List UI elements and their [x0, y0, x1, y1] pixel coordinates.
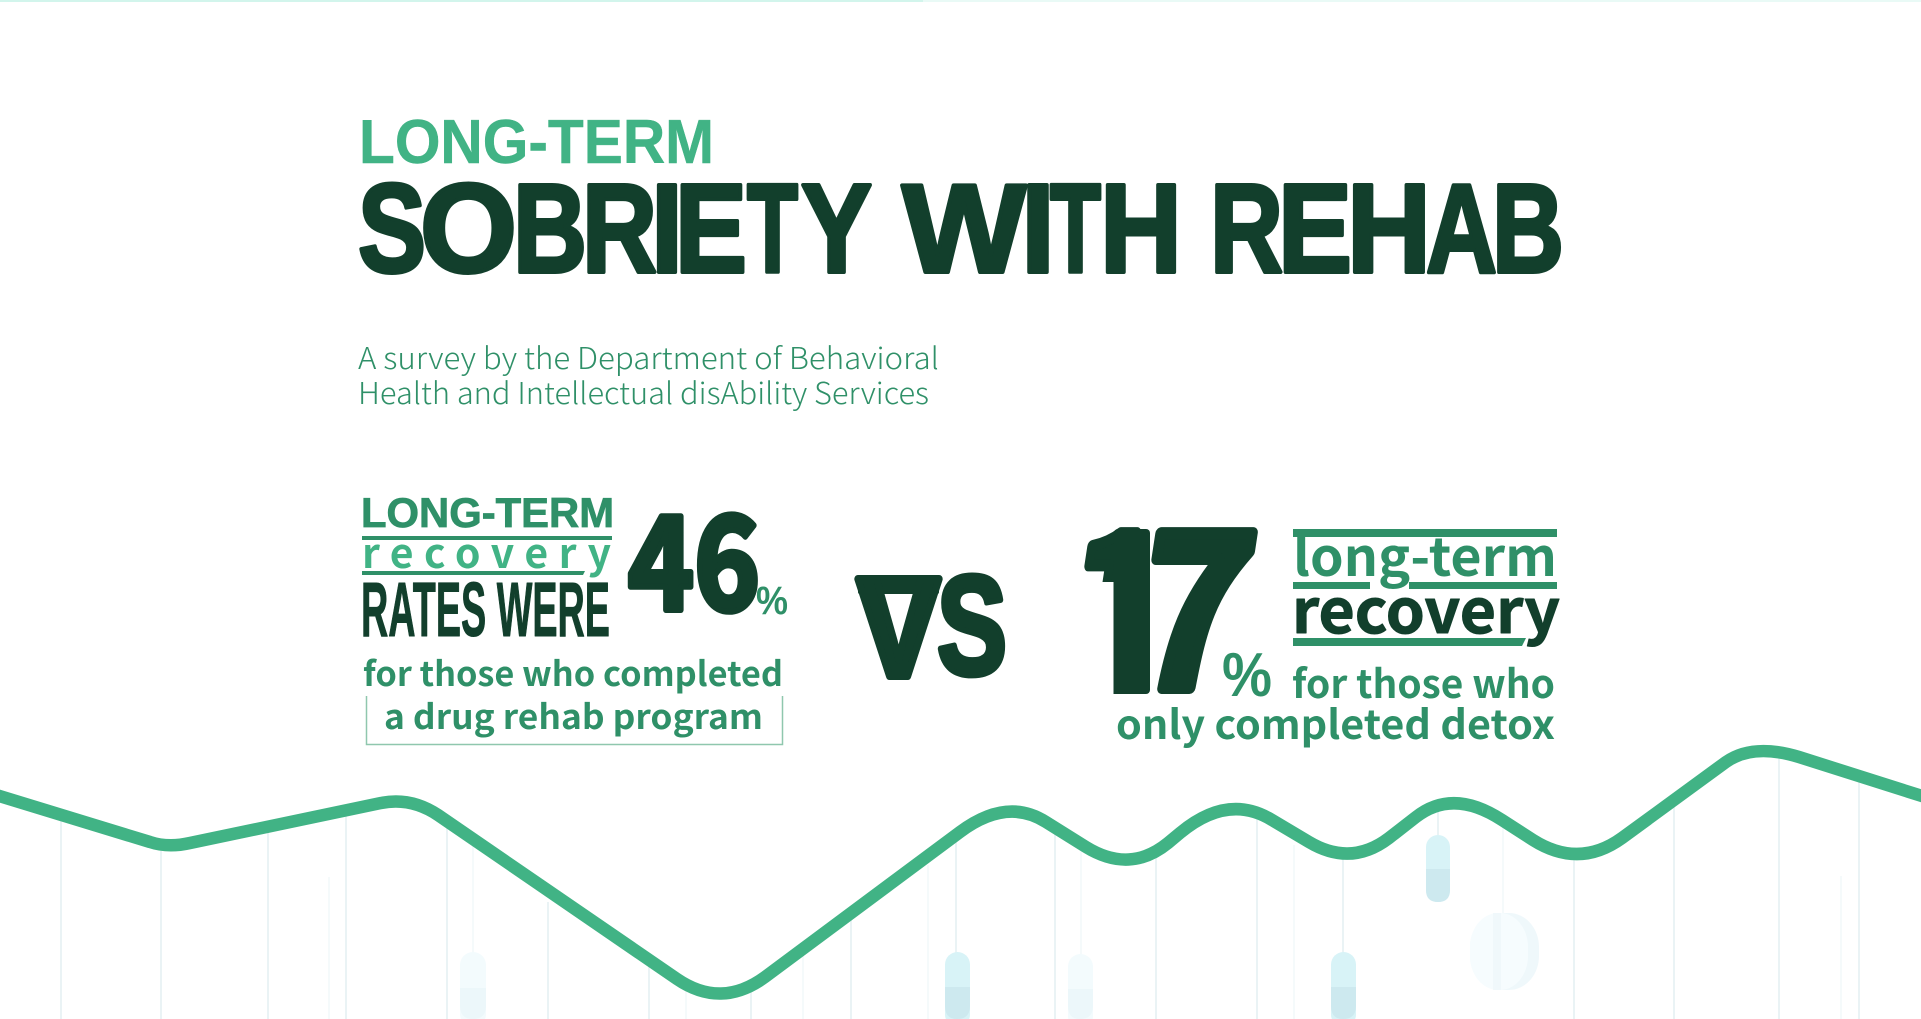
title line 2: H: [1100, 158, 1182, 299]
vs label: S: [937, 546, 1007, 704]
description: for those who: [1292, 654, 1555, 710]
number: 17 percent: 1: [1045, 445, 1181, 749]
title line 1: LONG-TERM: [359, 108, 714, 177]
heading: recovery: recovery: [362, 520, 611, 580]
icon: pill 2: [945, 952, 970, 1019]
title line 2: Y: [801, 158, 872, 299]
title line 2: E: [1278, 158, 1352, 299]
description bracket: [366, 696, 782, 744]
icon: pill 3: [1068, 954, 1093, 1019]
title line 2: T: [1050, 158, 1101, 299]
subtitle: A survey by the Department of Behavioral: [358, 334, 939, 378]
icon: pill 4: [1331, 952, 1356, 1019]
title line 2: E: [675, 158, 747, 299]
icon: pill 1: [460, 952, 486, 1019]
title line 2: O: [420, 158, 517, 299]
background grid lines: [61, 755, 1859, 1019]
heading: long-term: long-term: [1293, 516, 1557, 592]
title line 2: R: [1210, 158, 1283, 299]
panel: rehab statistic: [361, 460, 788, 744]
subtitle: [358, 334, 939, 413]
title line 2: A: [1426, 158, 1497, 299]
title line 2: B: [1492, 158, 1564, 299]
title line 2: B: [513, 158, 587, 299]
description: for those who completed: [363, 647, 783, 696]
title line 2: R: [582, 158, 657, 299]
panel: rehab statistic: RATES WERE: [361, 567, 610, 653]
title line 2: I: [651, 158, 683, 299]
title: [358, 108, 1564, 299]
title line 2: S: [358, 158, 426, 299]
number: 17 percent: %: [1222, 641, 1272, 710]
panel: rehab statistic: a drug rehab program: [384, 690, 763, 739]
subtitle: Health and Intellectual disAbility Services: [358, 369, 929, 413]
panel: detox statistic: only completed detox: [1116, 693, 1555, 751]
recovery wave line: [0, 751, 1921, 994]
number: 17 percent: 7: [1119, 445, 1275, 749]
panel: detox statistic: [1045, 445, 1560, 751]
title line 2: T: [747, 158, 798, 299]
vs label: V: [857, 548, 940, 706]
heading: long-term: LONG-TERM: [361, 489, 614, 536]
title line 2: I: [1021, 158, 1055, 299]
title line 2: H: [1347, 158, 1431, 299]
icon: pill 5: [1426, 835, 1450, 902]
number: 46 percent: %: [756, 579, 788, 623]
number: 46 percent: 46: [628, 460, 760, 648]
heading: recovery: recovery: [1292, 562, 1560, 651]
icon: round tablet: [1470, 913, 1539, 990]
title line 2: [358, 158, 1564, 299]
vs label: [857, 546, 1007, 706]
title line 2: W: [902, 158, 1026, 299]
